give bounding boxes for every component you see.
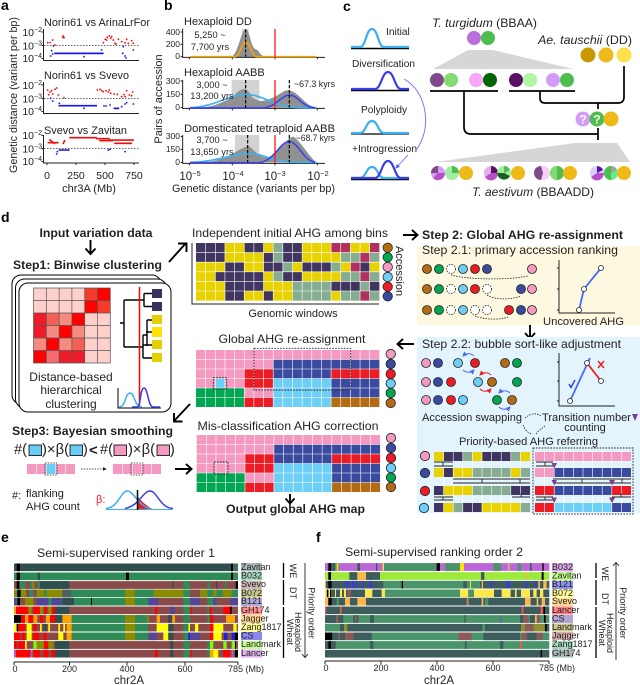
heading: independent initial AHG: Independent initial AHG among bins <box>192 226 388 240</box>
plot: domesticated tetraploid AABB <box>166 123 335 167</box>
plot: hexaploid DD: 200 <box>166 39 180 49</box>
accession circles global <box>386 349 395 408</box>
y tick labels a <box>22 27 42 168</box>
curve: +introgression: +Introgression <box>352 144 417 155</box>
plot: Norin61 vs ArinaLrFor: Norin61 vs ArinaLrFor <box>44 17 150 29</box>
heading: global AHG re-assignment: Global AHG re-assignment <box>218 332 366 346</box>
x tick labels b: −4 <box>235 169 244 178</box>
y tick labels a: −3 <box>34 40 42 48</box>
accession labels e: Zavitan <box>241 562 271 572</box>
y tick labels a: −2 <box>34 27 42 34</box>
chart: transition number <box>557 353 615 406</box>
accession labels e: Lancer <box>241 648 269 658</box>
panel e: AHG map order 1 <box>1 529 316 685</box>
panel: step 2.1 <box>417 243 640 328</box>
y tick labels a: −4 <box>34 53 42 60</box>
swapping labels: Accession swapping <box>422 412 522 424</box>
distance heatmap <box>34 288 110 363</box>
plot: hexaploid AABB: 13,200 yrs <box>190 91 234 101</box>
accession labels f: Svevo <box>552 596 577 606</box>
y tick labels a: 10 <box>22 130 34 142</box>
accession labels f: Jagger <box>552 630 580 640</box>
plot: hexaploid AABB: ~67.3 kyrs <box>294 79 335 89</box>
x axis f: 600 <box>485 663 501 673</box>
accession labels e: Landmark <box>241 639 282 649</box>
plot: Norin61 vs ArinaLrFor <box>42 17 150 60</box>
chromosome painting e <box>14 567 238 654</box>
AHG bars before referring <box>434 452 530 512</box>
panel label f: f <box>316 529 321 545</box>
accession labels e: Zang1817 <box>241 622 282 632</box>
chromosome painting f <box>325 567 549 654</box>
y tick labels a: 10 <box>22 27 34 39</box>
AHG bars after referring <box>535 452 631 512</box>
x axis e: 785 (Mb) <box>228 664 264 674</box>
x tick labels b: −2 <box>320 169 329 178</box>
heatmap: global AHG <box>196 348 379 407</box>
y axis title b: Pairs of accession <box>153 54 165 144</box>
phylogeny tree <box>430 66 624 140</box>
accession labels e: B072 <box>241 588 262 598</box>
x axis f: 400 <box>429 663 445 673</box>
group labels e: Wheat <box>285 619 295 646</box>
panel d: AHG workflow <box>1 209 640 516</box>
plot: hexaploid AABB: 150 <box>166 89 180 99</box>
plot: Svevo vs Zavitan <box>42 125 139 165</box>
x tick labels a: 750 <box>125 170 143 182</box>
accession pairs <box>430 73 574 87</box>
swap circles <box>422 358 522 404</box>
arrow: to initial AHG <box>169 243 186 262</box>
panel label d: d <box>1 209 10 225</box>
accession labels e <box>241 562 282 658</box>
plot: domesticated tetraploid AABB: 300 <box>166 131 180 141</box>
y tick labels a: −3 <box>34 144 42 150</box>
plot: domesticated tetraploid AABB: Domesticated tetraploid AABB <box>184 123 335 135</box>
chart: uncovered AHG: Uncovered AHG <box>543 316 624 328</box>
smoothing formula: #( <box>100 442 113 458</box>
legend: flanking count: AHG count <box>26 501 80 513</box>
beta distribution: β: <box>96 494 105 506</box>
swapping labels: counting <box>564 422 606 434</box>
curve: initial <box>351 27 410 48</box>
panel f: AHG map order 2 <box>316 529 628 685</box>
accession labels f: B032 <box>552 562 573 572</box>
plot: domesticated tetraploid AABB: 3,700 ~ <box>196 135 228 145</box>
heatmap: initial AHG <box>192 243 379 304</box>
panel label e: e <box>1 529 9 545</box>
accession labels e: B121 <box>241 596 262 606</box>
plot: domesticated tetraploid AABB: 0 <box>175 157 180 167</box>
heading: Ae. tauschii: Ae. tauschii (DD) <box>537 33 632 47</box>
y tick labels a: 10 <box>22 156 34 168</box>
arrow: to output <box>286 494 294 504</box>
plot: hexaploid DD: Hexaploid DD <box>184 16 252 28</box>
y tick labels a: 10 <box>22 80 34 92</box>
swapping labels: Transition number <box>542 412 631 424</box>
smoothing formula: #( <box>14 442 27 458</box>
arrow: to step 2 <box>403 230 418 240</box>
mini distribution <box>118 388 161 408</box>
plot: domesticated tetraploid AABB: 13,650 yrs <box>190 147 234 157</box>
group brackets f <box>595 563 597 658</box>
group labels e <box>285 564 303 652</box>
beta distribution <box>96 490 173 510</box>
x axis e: 200 <box>62 664 77 674</box>
plot: hexaploid AABB: 0 <box>175 102 180 112</box>
smoothing formula: < <box>89 442 98 459</box>
y tick labels a: 10 <box>22 53 34 65</box>
panel c: polyploid evolution diagram <box>343 0 632 199</box>
step 1 card stack <box>12 275 171 412</box>
accession labels f: B121 <box>552 579 573 589</box>
legend: flanking count <box>12 488 80 513</box>
accession labels f: B072 <box>552 588 573 598</box>
y tick labels a: −2 <box>34 130 42 137</box>
heading: T. aestivum: T. aestivum (BBAADD) <box>472 185 594 199</box>
x axis title b: Genetic distance (variants per bp) <box>172 183 335 195</box>
y tick labels a: 10 <box>22 144 34 156</box>
accession labels e: GH174 <box>241 605 270 615</box>
arrow: back to global <box>398 339 414 349</box>
group labels f <box>597 567 615 653</box>
curve: initial: Initial <box>386 27 410 38</box>
x axis f: 200 <box>373 663 389 673</box>
accession labels f: CS <box>552 614 565 624</box>
arrow: input to step 1 <box>86 240 96 254</box>
smoothing formula: ) <box>83 442 88 458</box>
curve: +introgression <box>351 144 417 180</box>
plot: hexaploid AABB: 3,000 ~ <box>196 80 228 90</box>
y tick labels a: 10 <box>22 94 34 106</box>
row circles <box>419 451 430 513</box>
legend: flanking count: flanking <box>26 488 64 500</box>
icon: BBAA circles <box>467 31 495 45</box>
cluster squares <box>152 289 162 362</box>
priority arrow e <box>302 563 308 658</box>
accession labels e: Jagger <box>241 614 269 624</box>
genomic windows label: Genomic windows <box>248 308 338 320</box>
unknown progenitor circles <box>576 112 618 126</box>
grey trapezoid bottom <box>435 143 630 162</box>
x axis title a: chr3A (Mb) <box>62 183 116 195</box>
heading: T. turgidum: T. turgidum (BBAA) <box>432 16 537 30</box>
panel: step 2.2 <box>417 337 640 514</box>
x tick labels b: 10 <box>307 171 320 183</box>
smoothing windows <box>27 463 161 475</box>
accession label: Accession <box>393 246 405 296</box>
plot: hexaploid DD: 400 <box>166 27 180 37</box>
x tick labels b <box>179 169 329 183</box>
curve: polyploidy: Polyploidy <box>361 105 408 116</box>
priority label f: Priority order <box>618 587 628 639</box>
link lines <box>434 462 631 500</box>
x axis e: 0 <box>12 664 18 674</box>
plot: hexaploid DD: 5,250 ~ <box>194 30 226 40</box>
heading: mis-classification correction: Mis-classification AHG correction <box>198 419 378 433</box>
group labels e: WE <box>288 564 298 578</box>
group labels f: Hexaploid <box>605 613 615 653</box>
clustering caption: hierarchical <box>40 383 102 397</box>
arrow: 2.1 to 2.2 <box>525 325 535 338</box>
panel: step 2.1: Step 2.1: primary accession ranking <box>422 243 618 257</box>
accession labels f: Zang1817 <box>552 639 593 649</box>
x tick labels b: 10 <box>264 171 277 183</box>
smoothing formula <box>14 442 175 459</box>
x axis e: 400 <box>119 664 135 674</box>
swapping labels: Priority-based AHG referring <box>459 436 598 448</box>
group labels f: WE <box>600 567 610 581</box>
accession labels e: CS <box>241 630 254 640</box>
x axis f: 785 (Mb) <box>539 663 575 673</box>
x tick labels b: −3 <box>277 169 286 178</box>
output heading: Output global AHG map <box>226 502 365 516</box>
accession labels f: Zavitan <box>552 570 582 580</box>
accession labels e: Svevo <box>241 579 266 589</box>
unknown progenitor circles: ? <box>593 112 601 126</box>
cut line <box>138 287 140 407</box>
accession labels f: GH174 <box>552 648 581 658</box>
group brackets e <box>282 563 284 658</box>
accession labels f: Landmark <box>552 622 593 632</box>
y tick labels a: −4 <box>34 106 42 113</box>
title f: Semi-supervised ranking order 2 <box>345 545 523 559</box>
step 3 heading: Step3: Bayesian smoothing <box>12 424 173 438</box>
step 1 heading: Step1: Binwise clustering <box>13 258 162 272</box>
accession circles <box>383 243 392 301</box>
dendrogram <box>120 294 152 358</box>
accession circles corrected <box>386 433 396 492</box>
plot: Svevo vs Zavitan: Svevo vs Zavitan <box>44 125 127 137</box>
x tick labels b: 10 <box>179 171 192 183</box>
accession labels e: B032 <box>241 570 262 580</box>
swap arrows <box>463 354 510 409</box>
x axis e <box>12 662 264 685</box>
priority label e: Priority order <box>306 587 316 639</box>
arrow: to step 3 <box>174 404 190 422</box>
clustering caption: clustering <box>45 397 97 411</box>
smoothing formula: )×β( <box>128 442 155 458</box>
group labels f: DT <box>600 593 610 605</box>
plot: hexaploid DD: 7,700 yrs <box>191 42 229 52</box>
plot: domesticated tetraploid AABB: ~68.7 kyrs <box>296 133 335 143</box>
y tick labels a: 10 <box>22 106 34 118</box>
unknown progenitor circles: ? <box>579 112 587 126</box>
chart: uncovered AHG <box>543 260 624 328</box>
mosaic pie circles <box>431 166 631 180</box>
y tick labels a: −3 <box>34 94 42 100</box>
ranking circles <box>422 264 536 314</box>
arrow: introgression <box>396 79 426 168</box>
title e: Semi-supervised ranking order 1 <box>37 546 215 560</box>
dotted flow arrows <box>523 414 545 434</box>
group labels e: Hexaploid <box>293 612 303 652</box>
swapping labels <box>422 412 631 448</box>
priority arrow f <box>613 562 619 660</box>
x axis e: 600 <box>177 664 193 674</box>
icon: DD circles <box>580 48 632 62</box>
y tick labels a: −4 <box>34 156 42 163</box>
plot: hexaploid AABB: 300 <box>166 76 180 86</box>
smoothing formula: )×β( <box>42 442 69 458</box>
input heading: Input variation data <box>40 226 153 240</box>
x axis f <box>323 661 575 685</box>
curve: polyploidy <box>351 105 409 134</box>
y tick labels a: −2 <box>34 80 42 87</box>
ranking dotted arrows <box>451 275 528 319</box>
step 2 heading: Step 2: Global AHG re-assignment <box>422 228 623 242</box>
heatmap: corrected AHG <box>197 435 380 492</box>
x tick labels a: 0 <box>44 170 50 182</box>
plot: Norin61 vs Svevo <box>42 70 139 114</box>
smoothing formula: ) <box>170 442 175 458</box>
dotted frame <box>533 448 633 514</box>
clustering caption <box>29 370 113 411</box>
plot: hexaploid AABB <box>166 67 335 112</box>
accession labels f: Lancer <box>552 605 580 615</box>
accession labels f <box>552 562 593 658</box>
y tick labels a: 10 <box>22 40 34 52</box>
group labels f: Wheat <box>597 620 607 647</box>
x tick labels a: 500 <box>96 170 114 182</box>
grey trapezoid top <box>433 50 573 69</box>
group labels e: DT <box>288 587 298 599</box>
plot: Norin61 vs Svevo: Norin61 vs Svevo <box>44 70 129 82</box>
plot: hexaploid DD: 0 <box>175 51 180 61</box>
plot: domesticated tetraploid AABB: 150 <box>166 144 180 154</box>
legend: flanking count: #: <box>12 490 21 502</box>
panel: step 2.2: Step 2.2: bubble sort-like adjustment <box>422 337 622 351</box>
x tick labels a <box>44 170 143 182</box>
panel b: pairs of accession density curves <box>153 0 335 195</box>
x tick labels b: −5 <box>192 169 201 178</box>
transition marker <box>632 414 638 421</box>
arrow: to correction grid <box>175 464 192 474</box>
x tick labels a: 250 <box>67 170 85 182</box>
curve: diversification <box>351 59 415 90</box>
purple markers <box>552 463 615 503</box>
clustering caption: Distance-based <box>29 370 113 384</box>
plot: hexaploid AABB: Hexaploid AABB <box>184 67 265 79</box>
x axis f: 0 <box>323 663 329 673</box>
y axis title: Genetic distance (variant per bp) <box>8 17 20 173</box>
plot: hexaploid DD <box>166 16 325 61</box>
panel a: genetic distance scatter plots <box>1 0 150 195</box>
x tick labels b: 10 <box>222 171 235 183</box>
curve: diversification: Diversification <box>352 59 415 70</box>
